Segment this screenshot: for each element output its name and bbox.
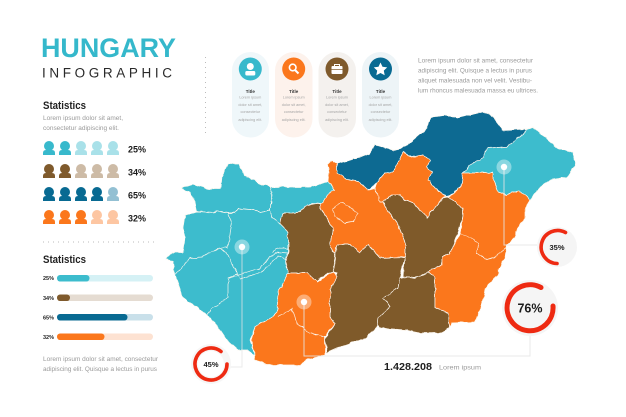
text block: statistics intro [43,115,123,132]
text block: bars note [43,356,159,373]
pictogram row: 65% [43,187,147,202]
card: person: dolor sit amet, [238,103,262,107]
region: orange east border [460,233,507,260]
total figure: Lorem ipsum [439,364,481,372]
donut: 35%: 35% [549,243,565,252]
pictogram row: 34% [43,164,147,178]
title: HUNGARY [41,33,176,63]
pictogram row: 65%: 65% [128,190,147,202]
card: person: Title [246,89,255,94]
region: teal internal borders [175,213,288,315]
card: star: Title [376,89,386,94]
region: north teal [270,181,335,224]
total figure [384,361,481,373]
card: star [362,52,399,138]
region: brown south [377,272,449,333]
text block: bars note: adipiscing elit. Quisque a lectus in purus [43,366,158,373]
region: brown centre [325,245,405,353]
icon: briefcase [326,58,348,80]
icon: magnifier [282,58,305,80]
text block: statistics intro: Lorem ipsum dolor sit amet, [43,115,123,122]
region: orange capital outline [333,202,358,223]
icon: star [369,58,392,80]
text block: intro right [418,58,538,94]
icon: person [239,58,262,80]
donut: 45% [191,344,231,384]
card: briefcase: consectetur [327,110,348,114]
bar: 25%: 25% [43,276,54,282]
bar chart [43,275,153,341]
card: briefcase [318,52,356,138]
bar: 34%: 34% [43,296,54,302]
heading: statistics top: Statistics [43,100,86,112]
pictogram row: 25%: 25% [128,144,147,156]
region: orange centre [320,160,405,258]
card: star: consectetur [371,110,391,114]
card: search: Title [289,89,299,94]
title [41,33,176,80]
card: person: adipiscing elit. [238,118,262,122]
card: person: consectetur [240,110,261,114]
region: orange south-west border [278,308,325,337]
region: orange east [428,172,530,328]
card: search [275,52,312,138]
card: briefcase: dolor sit amet, [325,103,349,107]
donut: 45%: 45% [203,360,219,369]
pictogram row: 32%: 32% [128,214,147,224]
text block: intro right: adipiscing elit. Quisque a lectus in purus [418,68,533,74]
card: briefcase: Title [332,89,342,94]
region: orange north [375,153,447,217]
card: star: adipiscing elit. [369,118,392,122]
text block: intro right: Lorem ipsum dolor sit amet, consectetur [418,58,534,64]
card: star: dolor sit amet, [369,103,392,107]
title: INFOGRAPHIC [42,66,172,80]
marker: north-east [496,160,512,174]
card: search: Lorem ipsum [283,96,305,100]
region: brown west [280,203,335,282]
heading: statistics bars: Statistics [43,254,86,266]
donut: 35% [537,227,577,267]
card: person: Lorem ipsum [239,96,261,100]
card: search: adipiscing elit. [282,118,306,122]
region: dark blue north [337,113,527,196]
total figure: 1.428.208 [384,361,432,373]
pictogram row: 32% [43,210,147,224]
card: search: consectetur [284,110,304,114]
region: orange south-west [251,272,337,365]
bar: 65%: 65% [43,316,54,322]
donut: 76%: 76% [517,302,543,316]
marker: west [234,240,250,254]
region: north-west teal [182,164,272,213]
card: search: dolor sit amet, [282,103,306,107]
card: briefcase: Lorem ipsum [326,96,348,100]
region: teal north-east [463,127,575,200]
pictogram row: 25% [43,141,147,156]
bar: 32%: 32% [43,335,54,341]
card: briefcase: adipiscing elit. [325,118,349,122]
card: person [232,52,269,138]
text block: intro right: lum rhoncus malesuada massa eu ultrices. [418,88,538,94]
pictogram row: 34%: 34% [128,168,147,178]
text block: intro right: aliquet malesuada non vel velit. Vestibu- [418,78,532,84]
text block: statistics intro: consectetur adipiscing elit. [43,125,119,132]
text block: bars note: Lorem ipsum dolor sit amet, consectetur [43,356,159,363]
marker: south [296,294,312,310]
donut: 76% [502,280,558,336]
map of Hungary [165,113,575,365]
card: star: Lorem ipsum [370,96,391,100]
connector lines [228,167,537,367]
region: west teal [165,209,288,355]
region: brown right [382,195,463,278]
